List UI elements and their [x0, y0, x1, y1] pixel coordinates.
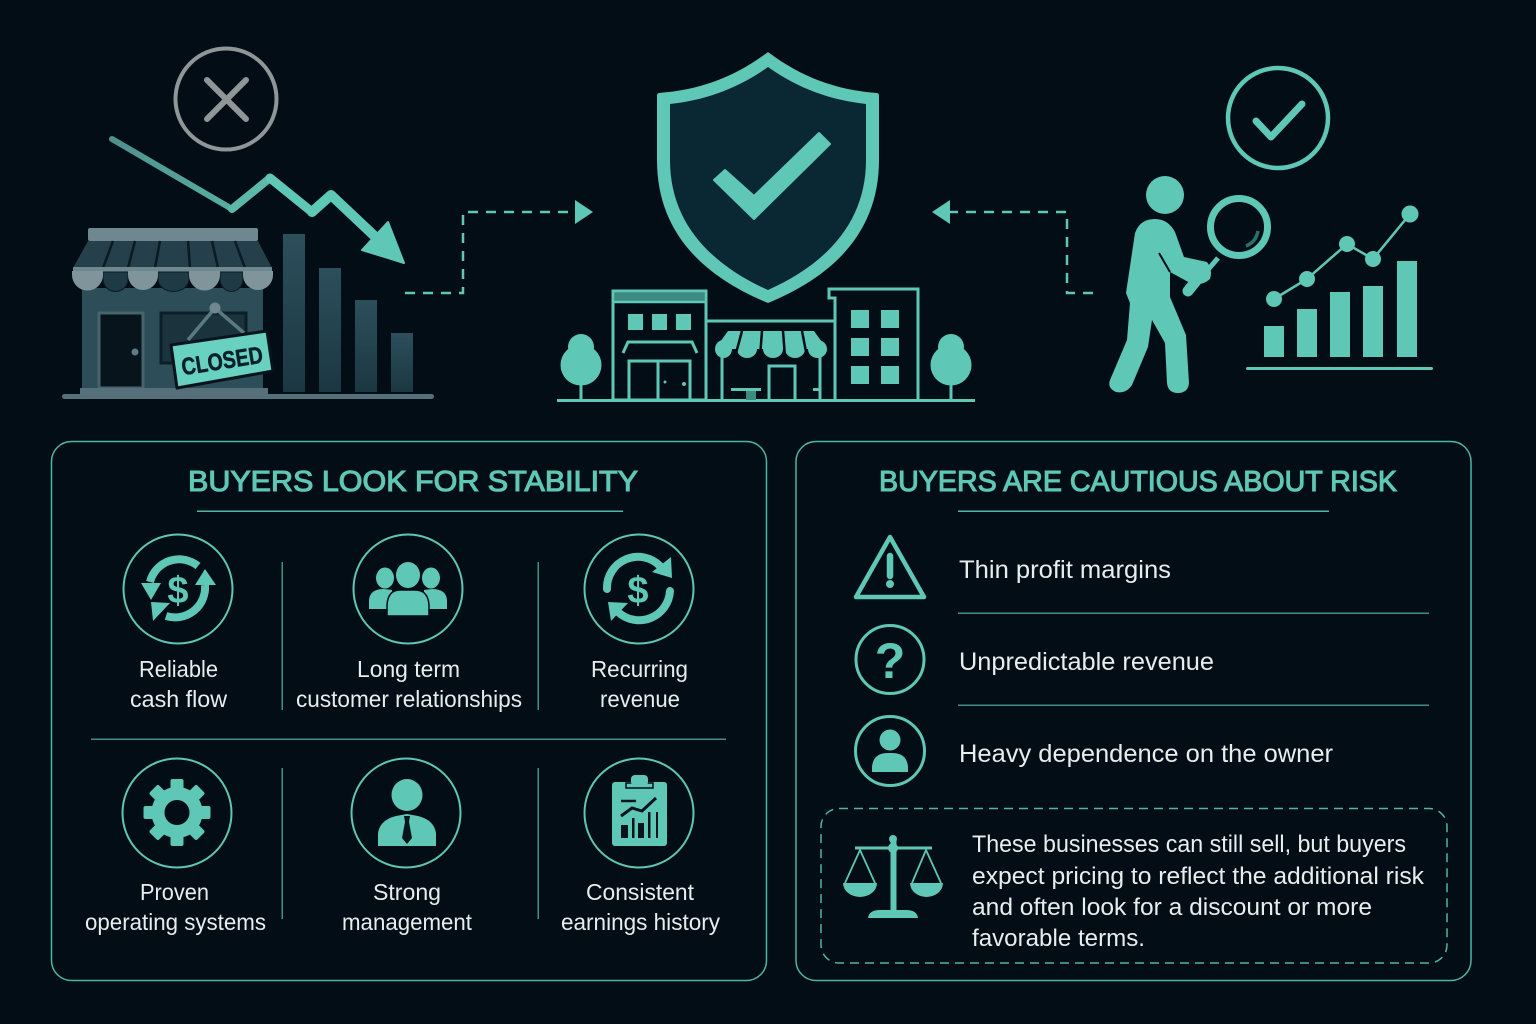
sign: closed — [171, 331, 273, 388]
icon: check in circle — [1228, 68, 1328, 168]
panel: buyers are cautious about risk — [796, 442, 1471, 980]
callout: pricing note — [821, 808, 1447, 963]
row: thin profit margins: Thin profit margins — [959, 556, 1171, 584]
item: strong management: Strong — [373, 879, 441, 905]
illustration: healthy main street — [557, 289, 975, 402]
callout text: and often look for a discount or more — [972, 894, 1372, 921]
item: reliable cash flow — [124, 534, 232, 712]
row divider — [958, 704, 1429, 706]
item: long term customer relationships — [296, 534, 522, 712]
chart: falling trend arrow — [112, 139, 404, 263]
sign: closed: CLOSED — [180, 342, 265, 381]
grid dividers — [91, 562, 726, 919]
icon: central shop — [706, 321, 834, 400]
callout text: These businesses can still sell, but buyers — [972, 831, 1406, 858]
row: unpredictable revenue: Unpredictable revenue — [959, 648, 1214, 676]
chart: rising bars and line — [1246, 206, 1433, 370]
item: consistent earnings history: Consistent — [586, 879, 695, 905]
item: proven operating systems: operating systems — [85, 909, 266, 935]
item: long term customer relationships: Long term — [357, 656, 460, 682]
item: recurring revenue: $ — [627, 570, 649, 612]
item: strong management — [342, 758, 473, 935]
row: heavy dependence on the owner — [856, 716, 1333, 786]
ground — [557, 399, 975, 402]
heading underline — [958, 510, 1329, 512]
item: reliable cash flow: Reliable — [139, 656, 218, 682]
item: reliable cash flow: $ — [167, 570, 189, 612]
heading: risk: BUYERS ARE CAUTIOUS ABOUT RISK — [879, 466, 1398, 498]
arrow: left dashed connector — [405, 200, 593, 293]
item: proven operating systems — [85, 758, 266, 935]
icon: shield with check — [657, 52, 879, 303]
item: consistent earnings history: earnings history — [561, 909, 720, 935]
row: thin profit margins — [856, 537, 1171, 597]
icon: X in circle — [176, 48, 276, 150]
row: unpredictable revenue: ? — [875, 633, 905, 689]
arrow: right dashed connector — [932, 200, 1093, 293]
icon: balance scale — [843, 835, 943, 918]
item: recurring revenue — [584, 534, 694, 712]
icon: right tree — [930, 334, 972, 400]
item: recurring revenue: revenue — [600, 686, 680, 712]
item: strong management: management — [342, 909, 473, 935]
item: consistent earnings history — [561, 758, 720, 935]
item: recurring revenue: Recurring — [591, 656, 688, 682]
chart: declining bars — [283, 234, 413, 392]
callout text: expect pricing to reflect the additional risk — [972, 863, 1425, 890]
heading: stability: BUYERS LOOK FOR STABILITY — [188, 466, 638, 498]
callout text: favorable terms. — [972, 925, 1145, 952]
heading underline — [197, 510, 623, 512]
illustration: declining business — [62, 48, 434, 399]
item: long term customer relationships: customer relationships — [296, 686, 522, 712]
row: unpredictable revenue — [856, 626, 1214, 694]
item: reliable cash flow: cash flow — [130, 686, 227, 712]
icon: office building — [613, 291, 706, 400]
icon: apartment building — [829, 289, 918, 400]
panel: buyers look for stability — [52, 442, 766, 980]
item: proven operating systems: Proven — [140, 879, 209, 905]
callout text — [972, 831, 1425, 952]
icon: closed storefront — [72, 228, 273, 394]
icon: left tree — [560, 334, 602, 400]
row: heavy dependence on the owner: Heavy dependence on the owner — [959, 740, 1333, 768]
ground line — [62, 394, 434, 399]
icon: person with magnifier — [1109, 176, 1268, 393]
row divider — [958, 612, 1429, 614]
